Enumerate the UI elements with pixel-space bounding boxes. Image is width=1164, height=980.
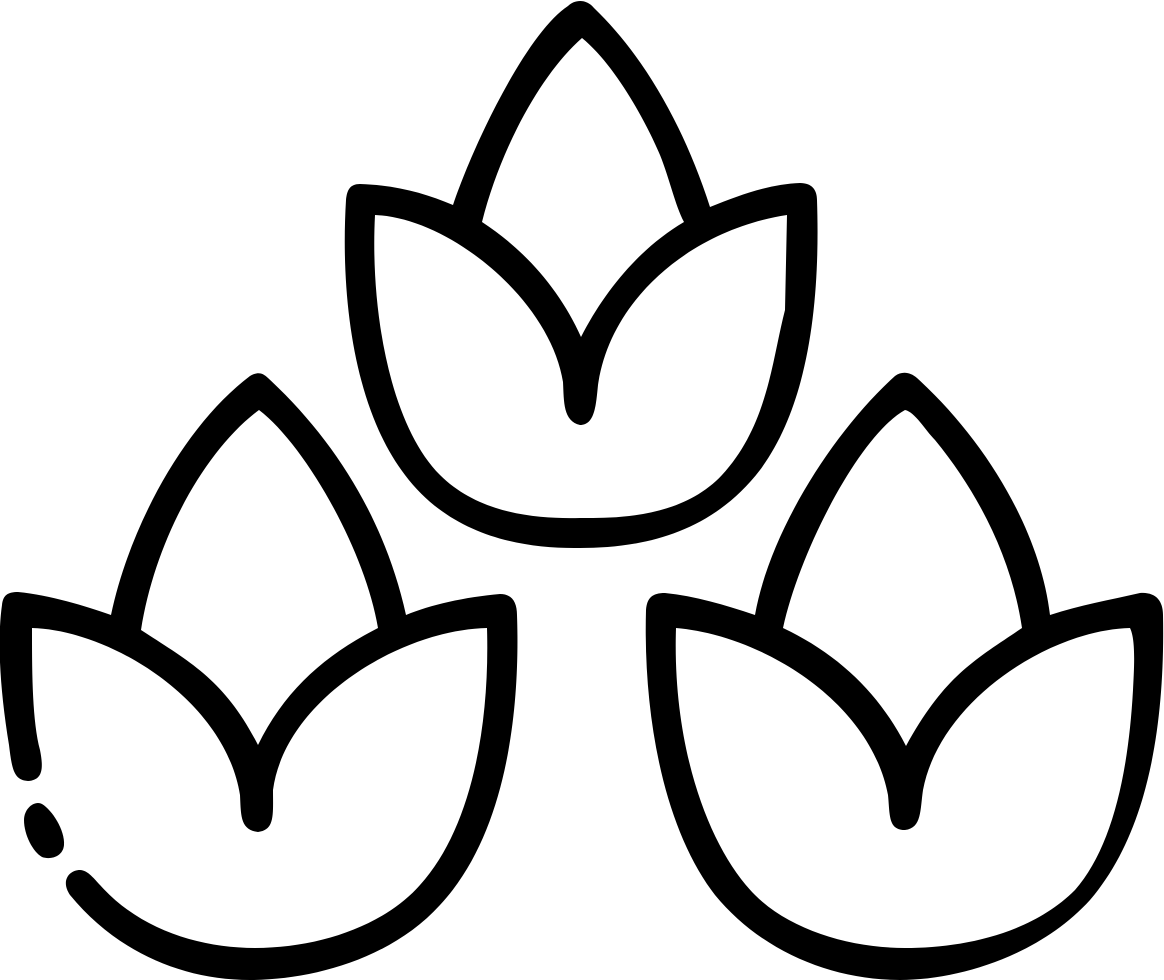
icon: lower right tulip bbox=[646, 373, 1163, 980]
icon: lower left tulip bbox=[0, 373, 517, 980]
icon: small dot in outline gap bbox=[24, 803, 64, 858]
icon: top tulip bbox=[345, 1, 818, 548]
